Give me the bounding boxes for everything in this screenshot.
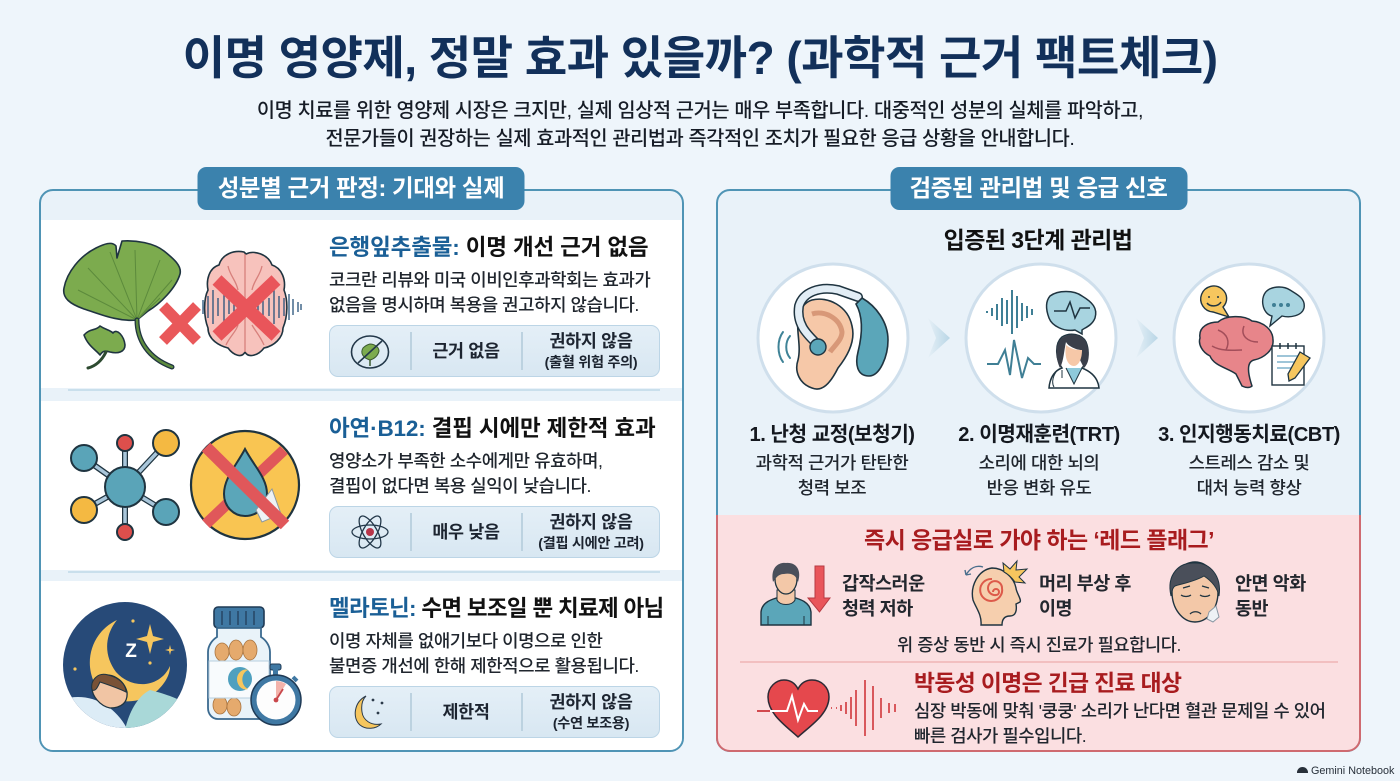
red flag heading: 즉시 응급실로 가야 하는 ‘레드 플래그’ <box>864 527 1214 553</box>
red flag 2 text <box>1039 573 1131 619</box>
step 2 description <box>979 453 1099 498</box>
red flag 1 text: 청력 저하 <box>842 598 913 619</box>
pulsatile tinnitus heading: 박동성 이명은 긴급 진료 대상 <box>914 670 1181 696</box>
pulsatile tinnitus description: 심장 박동에 맞춰 '쿵쿵' 소리가 난다면 혈관 문제일 수 있어 <box>914 701 1325 721</box>
icon: supplement bottle and stopwatch <box>207 606 302 726</box>
icon: ginkgo leaves with crossed-out brain <box>62 240 302 370</box>
step 3 description: 대처 능력 향상 <box>1197 478 1301 498</box>
icon: tired face <box>1169 561 1220 623</box>
panel: verified management <box>716 189 1361 752</box>
panel heading: ingredient evidence: 성분별 근거 판정: 기대와 실제 <box>218 175 504 201</box>
zinc description <box>329 451 602 496</box>
step 3 description <box>1189 453 1309 498</box>
step 1 description: 과학적 근거가 탄탄한 <box>756 453 908 473</box>
step 1 icon: ear with hearing aid <box>756 262 910 414</box>
watermark: Gemini Notebook <box>1311 765 1394 777</box>
separator <box>68 389 660 391</box>
step 2 icon: sound therapy <box>964 262 1118 414</box>
divider <box>740 661 1338 663</box>
pulsatile tinnitus description <box>914 701 1325 746</box>
recommendation label: (출혈 위험 주의) <box>545 355 637 371</box>
recommendation label <box>549 692 633 732</box>
melatonin description: 이명 자체를 없애기보다 이명으로 인한 <box>329 631 602 651</box>
card: zinc and B12 <box>41 401 682 570</box>
icon: molecule and crossed-out drop <box>70 429 300 541</box>
red flag 3 text: 안면 악화 <box>1235 573 1306 594</box>
intro text: 전문가들이 권장하는 실제 효과적인 관리법과 즉각적인 조치가 필요한 응급 상황을 안내합니다. <box>325 128 1075 150</box>
zinc description: 영양소가 부족한 소수에게만 유효하며, <box>329 451 602 471</box>
recommendation label <box>545 331 637 371</box>
icon: atom <box>351 515 389 549</box>
recommendation label: 권하지 않음 <box>549 692 633 712</box>
panel: ingredient evidence <box>39 189 684 752</box>
panel: red flags <box>716 515 1361 752</box>
ginkgo heading: 은행잎추출물: 이명 개선 근거 없음 <box>329 235 648 260</box>
red flag 3 text: 동반 <box>1235 598 1268 619</box>
ginkgo description: 코크란 리뷰와 미국 이비인후과학회는 효과가 <box>329 270 650 290</box>
melatonin description: 불면증 개선에 한해 제한적으로 활용됩니다. <box>329 656 639 676</box>
section heading: three steps: 입증된 3단계 관리법 <box>944 227 1132 253</box>
recommendation label: 권하지 않음 <box>549 331 633 351</box>
intro text <box>257 100 1143 150</box>
step 3 description: 스트레스 감소 및 <box>1189 453 1309 473</box>
evidence label: 매우 낮음 <box>432 522 500 542</box>
step 2 title: 2. 이명재훈련(TRT) <box>958 424 1120 446</box>
icon: head injury spiral <box>964 560 1028 626</box>
step 1 description: 청력 보조 <box>798 478 866 498</box>
melatonin heading: 멜라토닌: 수면 보조일 뿐 치료제 아님 <box>329 596 664 621</box>
zinc verdict chip <box>329 506 660 558</box>
red flag 2 text: 머리 부상 후 <box>1039 573 1131 594</box>
ginkgo description <box>329 270 650 315</box>
recommendation label: (결핍 시에안 고려) <box>538 536 644 552</box>
step 2 description: 소리에 대한 뇌의 <box>979 453 1099 473</box>
separator <box>68 571 660 573</box>
zinc description: 결핍이 없다면 복용 실익이 낮습니다. <box>329 476 591 496</box>
pulsatile tinnitus description: 빠른 검사가 필수입니다. <box>914 726 1086 746</box>
step 2 description: 반응 변화 유도 <box>987 478 1091 498</box>
intro text: 이명 치료를 위한 영양제 시장은 크지만, 실제 임상적 근거는 매우 부족합니다. 대중적인 성분의 실체를 파악하고, <box>257 100 1143 122</box>
panel heading: verified management <box>890 167 1187 210</box>
recommendation label: 권하지 않음 <box>549 512 633 532</box>
step arrow 2 <box>1138 321 1158 355</box>
card: melatonin <box>41 581 682 750</box>
red flag note: 위 증상 동반 시 즉시 진료가 필요합니다. <box>897 635 1181 655</box>
panel heading: verified management: 검증된 관리법 및 응급 신호 <box>910 175 1167 201</box>
title: 이명 영양제, 정말 효과 있을까? (과학적 근거 팩트체크) <box>183 32 1217 84</box>
red flag 2 text: 이명 <box>1039 598 1072 619</box>
panel heading: ingredient evidence <box>198 167 524 210</box>
step 3 icon: brain and notepad <box>1172 262 1326 414</box>
step arrow 1 <box>930 321 950 355</box>
step 3 title: 3. 인지행동치료(CBT) <box>1158 424 1340 446</box>
step 1 description <box>756 453 908 498</box>
red flag 1 text: 갑작스러운 <box>842 573 925 594</box>
melatonin description <box>329 631 639 676</box>
card: ginkgo <box>41 220 682 388</box>
icon: person with hearing drop <box>760 562 831 626</box>
zinc heading: 아연·B12: 결핍 시에만 제한적 효과 <box>329 416 656 441</box>
icon: sleeping person under the moon: Z <box>125 641 137 662</box>
ginkgo description: 없음을 명시하며 복용을 권고하지 않습니다. <box>329 295 639 315</box>
recommendation label <box>538 512 644 552</box>
red flag 3 text <box>1235 573 1306 619</box>
ginkgo verdict chip <box>329 325 660 377</box>
icon: sleeping person under the moon <box>63 602 187 728</box>
icon: heart with pulse <box>757 679 896 738</box>
icon: crescent moon <box>354 696 384 729</box>
icon: no ginkgo <box>350 335 390 369</box>
recommendation label: (수연 보조용) <box>553 716 629 732</box>
step 1 title: 1. 난청 교정(보청기) <box>749 424 915 446</box>
evidence label: 근거 없음 <box>432 341 500 361</box>
red flag 1 text <box>842 573 925 619</box>
evidence label: 제한적 <box>442 702 490 722</box>
melatonin verdict chip <box>329 686 660 738</box>
